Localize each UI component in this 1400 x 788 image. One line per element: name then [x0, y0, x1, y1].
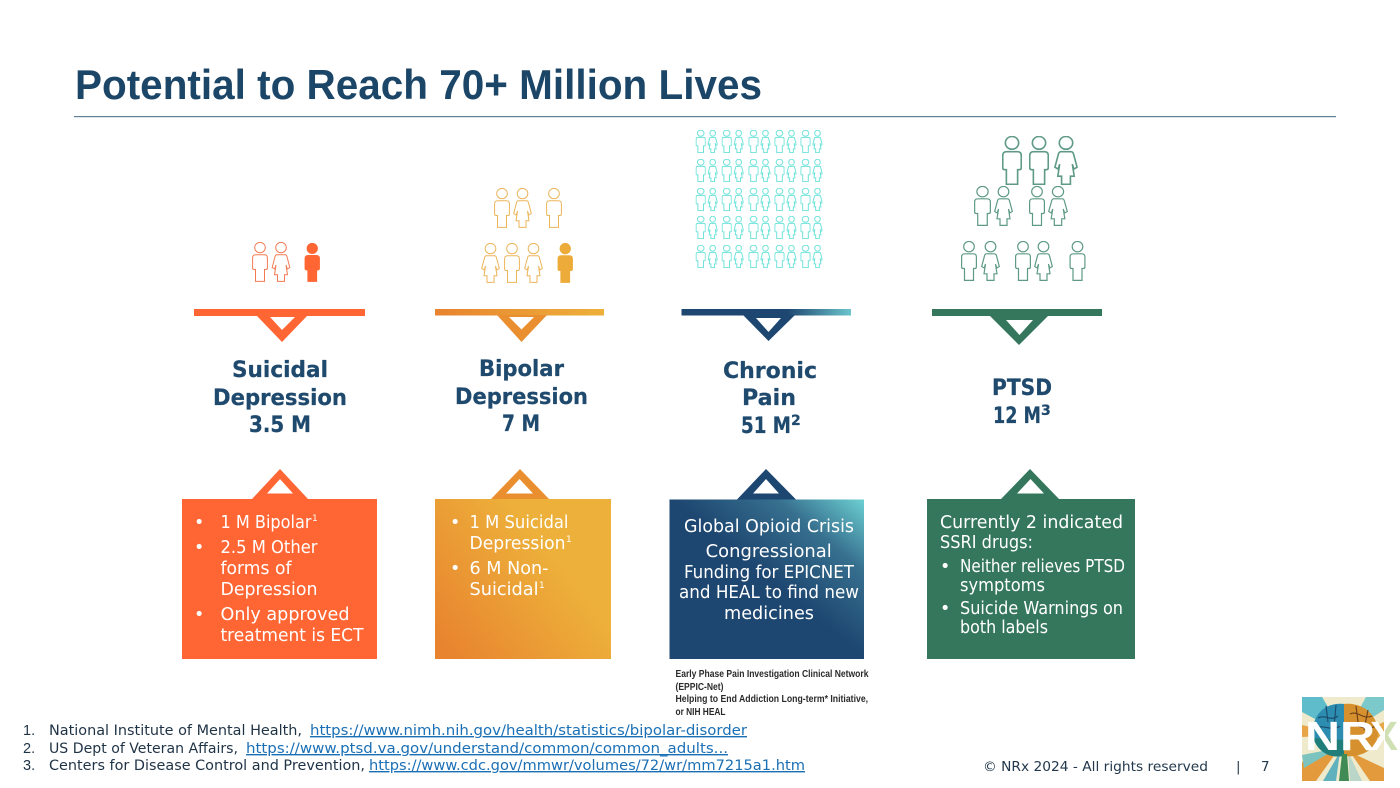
panel: chronic pain details: Funding for EPICNET — [684, 563, 854, 583]
panel: suicidal depression details — [182, 469, 377, 659]
panel: suicidal depression details: • — [194, 538, 204, 558]
panel: suicidal depression details: Only approved — [220, 605, 350, 625]
panel: PTSD details: • — [940, 557, 950, 577]
heading: suicidal depression 3.5 M: Depression — [213, 385, 347, 411]
heading: bipolar depression 7 M: Depression — [455, 384, 588, 410]
footer: copyright and page number: © NRx 2024 - All rights reserved — [983, 759, 1208, 775]
panel: chronic pain details: Congressional — [706, 542, 832, 562]
panel: bipolar depression details: • — [450, 513, 460, 533]
heading: chronic pain 51 M: 51 M — [741, 413, 791, 439]
heading: chronic pain 51 M: Pain — [742, 385, 796, 411]
panel: suicidal depression details: forms of — [220, 559, 292, 579]
panel: chronic pain details — [670, 469, 864, 659]
panel: bipolar depression details: 6 M Non- — [470, 559, 548, 579]
note: EPPIC-Net and HEAL definitions — [676, 669, 869, 718]
heading: chronic pain 51 M: 2 — [791, 413, 801, 429]
panel: PTSD details: • — [940, 599, 950, 619]
panel: suicidal depression details: • — [194, 513, 204, 533]
panel: PTSD details: Suicide Warnings on — [960, 599, 1123, 619]
logo: NRx brain — [1302, 697, 1398, 781]
icon group: chronic pain people — [696, 130, 822, 268]
panel: PTSD details: symptoms — [960, 576, 1045, 596]
heading: PTSD 12 M: 12 M — [993, 403, 1041, 429]
panel: suicidal depression details: 2.5 M Other — [220, 538, 318, 558]
footnotes: references: https://www.cdc.gov/mmwr/volumes/72/wr/mm7215a1.htm — [369, 758, 805, 774]
panel: PTSD details — [927, 469, 1135, 659]
connector bar: PTSD — [932, 309, 1102, 345]
panel: bipolar depression details: Depression — [470, 534, 566, 554]
connector bar: bipolar depression — [435, 309, 604, 342]
panel: chronic pain details: and HEAL to find new — [679, 583, 859, 603]
panel: bipolar depression details: Suicidal — [470, 580, 538, 600]
heading: bipolar depression 7 M: 7 M — [502, 411, 540, 437]
panel: suicidal depression details: 1 — [312, 514, 318, 524]
panel: PTSD details: Neither relieves PTSD — [960, 557, 1125, 577]
panel: bipolar depression details — [435, 469, 611, 659]
heading: suicidal depression 3.5 M: Suicidal — [232, 357, 328, 383]
panel: bipolar depression details: • — [450, 559, 460, 579]
title: Potential to Reach 70+ Million Lives — [75, 61, 762, 108]
panel: chronic pain details: medicines — [724, 604, 814, 624]
logo: NRx brain: NR — [1305, 713, 1375, 759]
heading: chronic pain 51 M — [723, 358, 817, 439]
heading: PTSD 12 M: 3 — [1041, 403, 1051, 419]
icon group: PTSD people — [962, 136, 1085, 280]
panel: bipolar depression details: 1 — [566, 535, 572, 545]
heading: PTSD 12 M: PTSD — [992, 375, 1052, 401]
heading: PTSD 12 M — [992, 375, 1052, 429]
heading: bipolar depression 7 M — [455, 356, 588, 437]
note: EPPIC-Net and HEAL definitions: Helping to End Addiction Long-term* Initiative, — [676, 694, 868, 705]
heading: suicidal depression 3.5 M — [213, 357, 347, 438]
panel: suicidal depression details: Depression — [220, 580, 318, 600]
footnotes: references: 1. — [23, 723, 35, 739]
logo: NRx brain: X — [1370, 713, 1398, 759]
panel: chronic pain details: Global Opioid Crisis — [684, 517, 854, 537]
connector bar: chronic pain — [682, 309, 851, 341]
footer: copyright and page number: 7 — [1261, 759, 1270, 775]
footnotes: references: https://www.ptsd.va.gov/understand/common/common_adults... — [246, 741, 728, 757]
heading: bipolar depression 7 M: Bipolar — [479, 356, 565, 382]
footnotes: references: US Dept of Veteran Affairs, — [49, 741, 238, 757]
panel: suicidal depression details: • — [194, 605, 204, 625]
footnotes: references: 3. — [23, 758, 35, 774]
heading: chronic pain 51 M: Chronic — [723, 358, 817, 384]
icon group: suicidal depression people — [253, 242, 319, 281]
footnotes: references: 2. — [23, 741, 35, 757]
footnotes: references — [23, 723, 805, 774]
panel: bipolar depression details: 1 M Suicidal — [470, 513, 568, 533]
connector bar: suicidal depression — [194, 309, 365, 342]
footnotes: references: https://www.nimh.nih.gov/health/statistics/bipolar-disorder — [310, 723, 747, 739]
note: EPPIC-Net and HEAL definitions: Early Phase Pain Investigation Clinical Network — [676, 669, 869, 680]
note: EPPIC-Net and HEAL definitions: (EPPIC-Net) — [676, 682, 724, 693]
icon group: bipolar depression people — [482, 188, 572, 282]
panel: bipolar depression details: 1 — [539, 581, 545, 591]
panel: suicidal depression details: treatment is ECT — [220, 626, 364, 646]
panel: suicidal depression details: 1 M Bipolar — [220, 513, 312, 533]
footnotes: references: Centers for Disease Control and Prevention, — [49, 758, 365, 774]
panel: PTSD details: SSRI drugs: — [940, 533, 1033, 553]
footnotes: references: National Institute of Mental Health, — [49, 723, 302, 739]
panel: PTSD details: Currently 2 indicated — [940, 513, 1123, 533]
footer: copyright and page number: | — [1236, 759, 1241, 775]
note: EPPIC-Net and HEAL definitions: or NIH HEAL — [676, 707, 726, 718]
panel: PTSD details: both labels — [960, 618, 1048, 638]
heading: suicidal depression 3.5 M: 3.5 M — [249, 412, 311, 438]
